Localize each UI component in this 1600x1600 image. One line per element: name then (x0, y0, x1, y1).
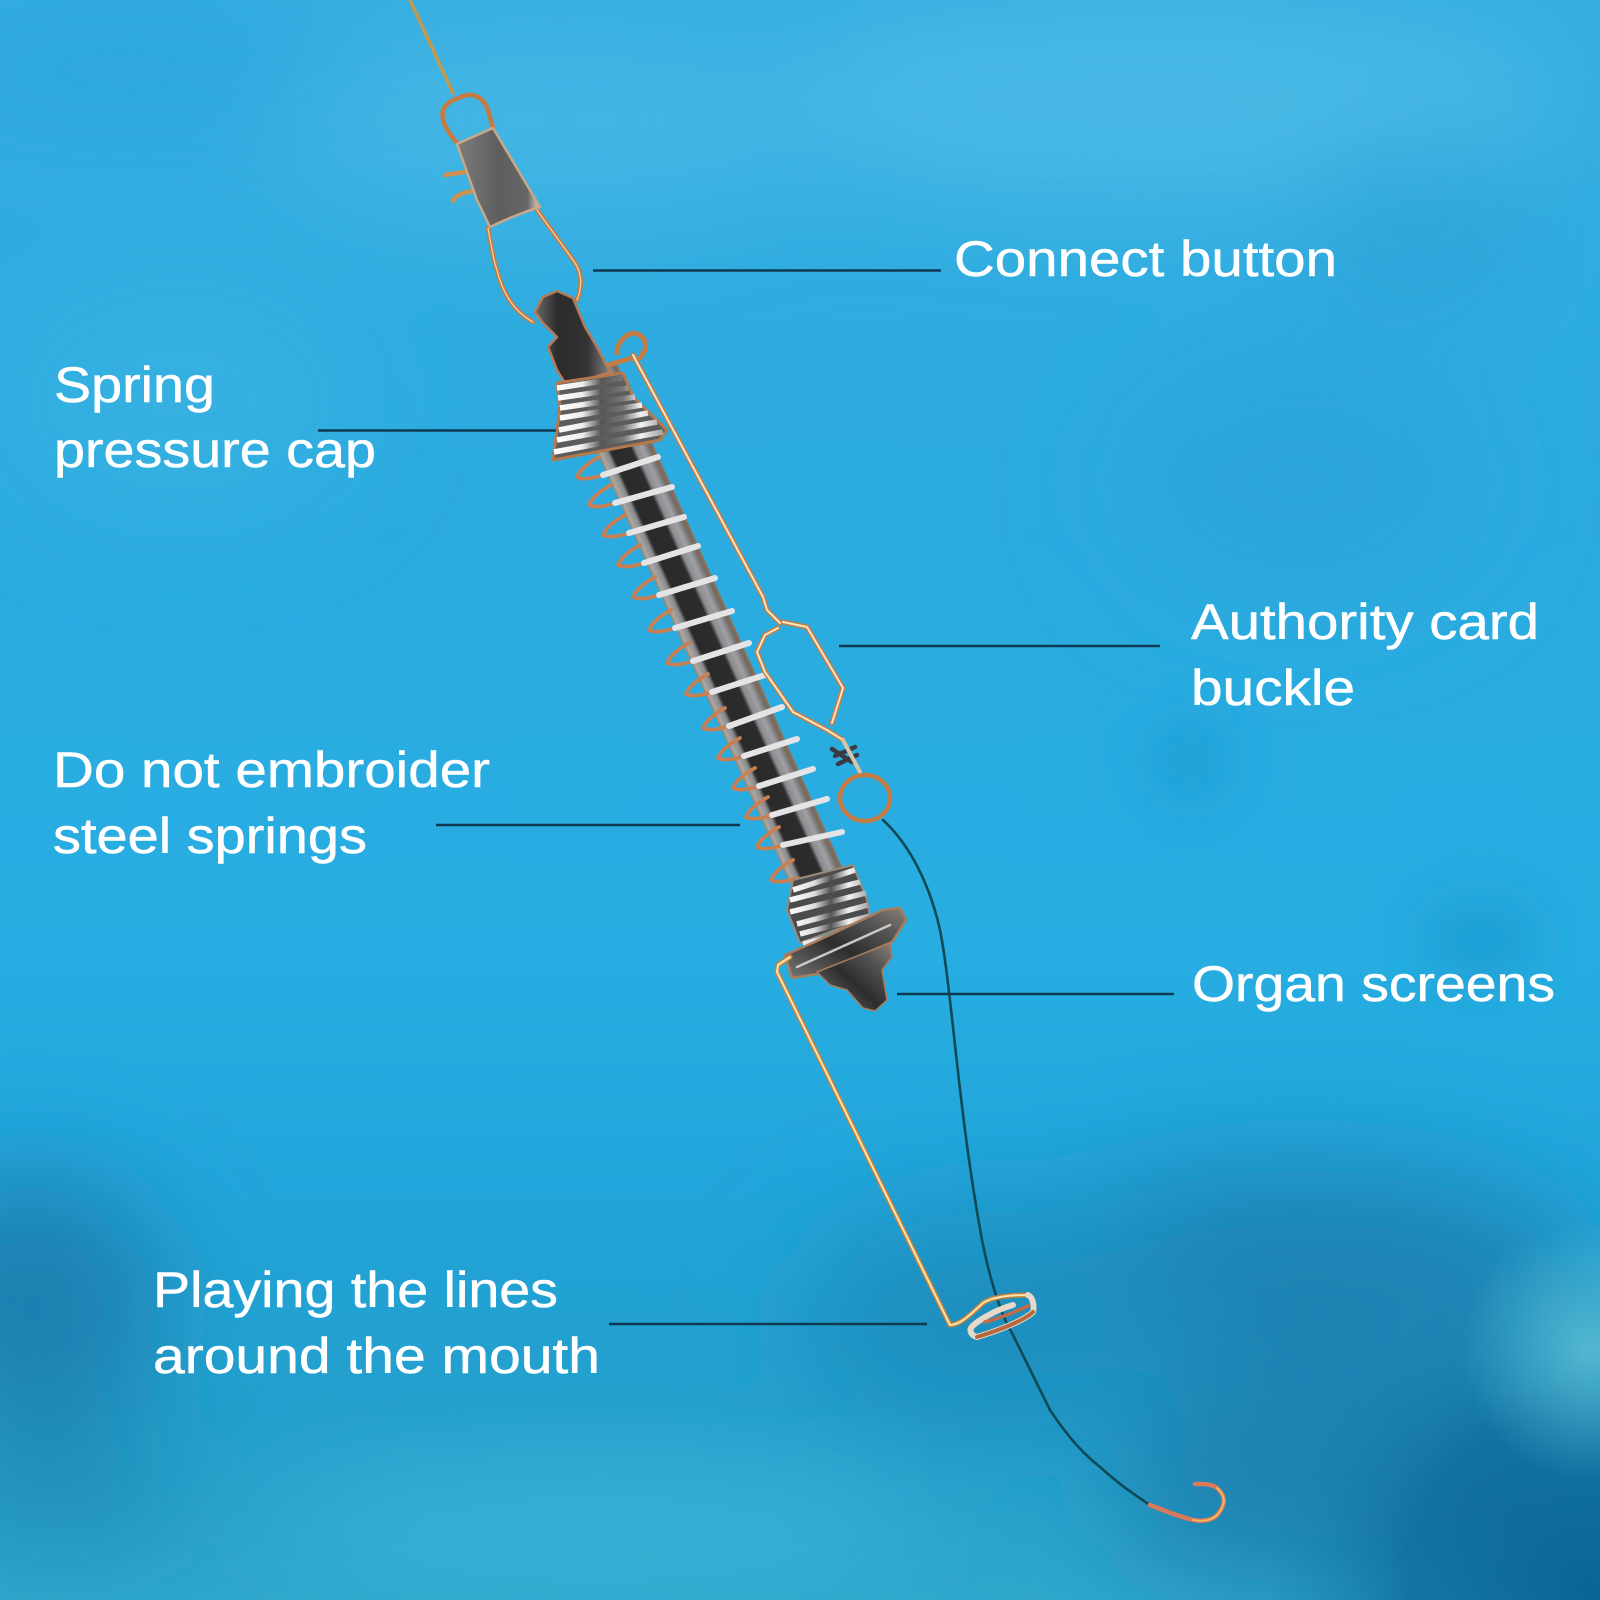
label: Connect button (954, 231, 1337, 287)
label: Do not embroider (53, 742, 490, 798)
label: pressure cap (54, 422, 376, 478)
leader line (436, 824, 740, 826)
leader line (839, 645, 1160, 647)
leader line (897, 993, 1174, 995)
callout: Spring pressure cap (54, 357, 556, 478)
spring coils, front strands (603, 457, 842, 845)
label: Authority card (1191, 594, 1539, 650)
label: Organ screens (1192, 956, 1555, 1012)
leader line (609, 1323, 927, 1325)
green leader line and hook (883, 820, 1224, 1521)
organ screen tip (817, 943, 892, 1011)
label: Spring (54, 357, 215, 413)
organ screen flange (785, 908, 906, 978)
rod body (568, 364, 858, 924)
callout: Authority card buckle (839, 594, 1553, 716)
rod head (535, 291, 610, 386)
leader line (318, 429, 556, 432)
label: Playing the lines (153, 1262, 558, 1318)
callout: Playing the lines around the mouth (153, 1262, 927, 1384)
authority card buckle and arm (608, 333, 890, 821)
lower spring stack (787, 865, 873, 944)
label: buckle (1191, 660, 1355, 716)
spring coils, rear loops (577, 457, 797, 882)
fishing rig (410, 0, 1224, 1521)
top wire and connect button (410, 0, 581, 322)
label: steel springs (53, 808, 367, 864)
callout: Do not embroider steel springs (53, 742, 740, 864)
label: around the mouth (153, 1328, 600, 1384)
leader line (593, 269, 941, 272)
spring pressure cap (553, 373, 667, 460)
long wire and mouth ring (777, 957, 1033, 1337)
